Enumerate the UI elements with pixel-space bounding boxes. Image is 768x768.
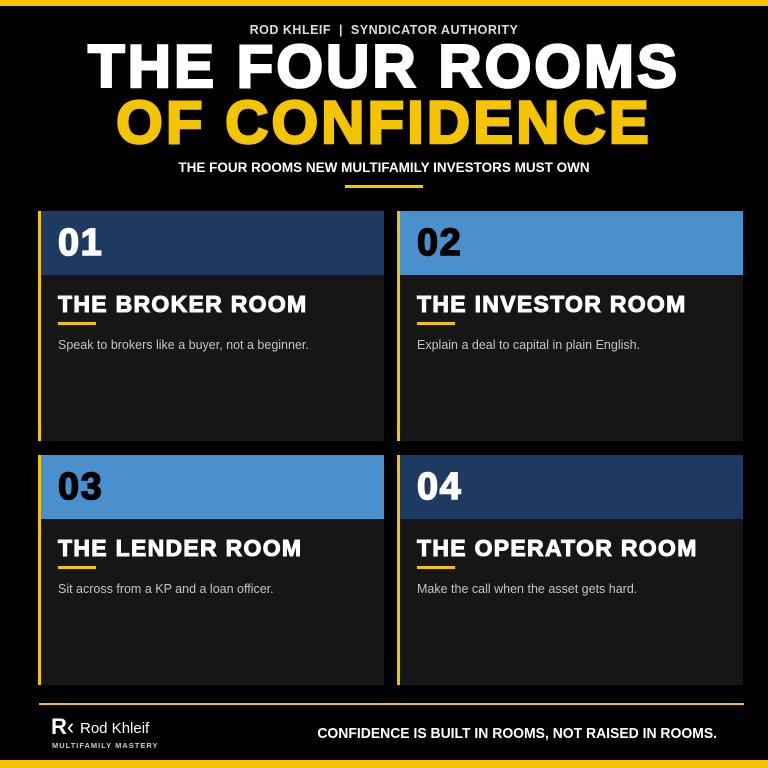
panel: 01 broker room — [38, 211, 384, 441]
title: THE FOUR ROOMS — [88, 33, 680, 100]
panel: 01 broker room: THE BROKER ROOM — [58, 291, 308, 317]
panel: 03 lender room — [38, 455, 384, 685]
panel: 04 operator room: THE OPERATOR ROOM — [417, 535, 698, 561]
panel: 02 investor room: Explain a deal to capital in plain English. — [417, 338, 640, 352]
panel: 03 lender room: Sit across from a KP and a loan officer. — [58, 582, 274, 596]
tagline: CONFIDENCE IS BUILT IN ROOMS, NOT RAISED IN ROOMS. — [317, 725, 717, 742]
panel: 04 operator room — [397, 455, 743, 685]
panel: 03 lender room: THE LENDER ROOM — [58, 535, 302, 561]
panel: 03 lender room: 03 — [58, 466, 103, 508]
panel: 04 operator room: 04 — [417, 466, 462, 508]
logo: R‹ — [51, 714, 74, 739]
panel: 02 investor room: THE INVESTOR ROOM — [417, 291, 687, 317]
title line 2: OF CONFIDENCE — [116, 89, 652, 156]
logo: MULTIFAMILY MASTERY — [52, 741, 159, 750]
subtitle: THE FOUR ROOMS NEW MULTIFAMILY INVESTORS MUST OWN — [178, 160, 590, 175]
panel: 02 investor room: 02 — [417, 222, 462, 264]
panel: 02 investor room — [397, 211, 743, 441]
panel: 04 operator room: Make the call when the asset gets hard. — [417, 582, 637, 596]
top byline: ROD KHLEIF | SYNDICATOR AUTHORITY — [250, 23, 518, 37]
logo: Rod Khleif — [80, 720, 149, 737]
panel: 01 broker room: Speak to brokers like a buyer, not a beginner. — [58, 338, 309, 352]
logo — [51, 714, 159, 750]
panel: 01 broker room: 01 — [58, 222, 103, 264]
